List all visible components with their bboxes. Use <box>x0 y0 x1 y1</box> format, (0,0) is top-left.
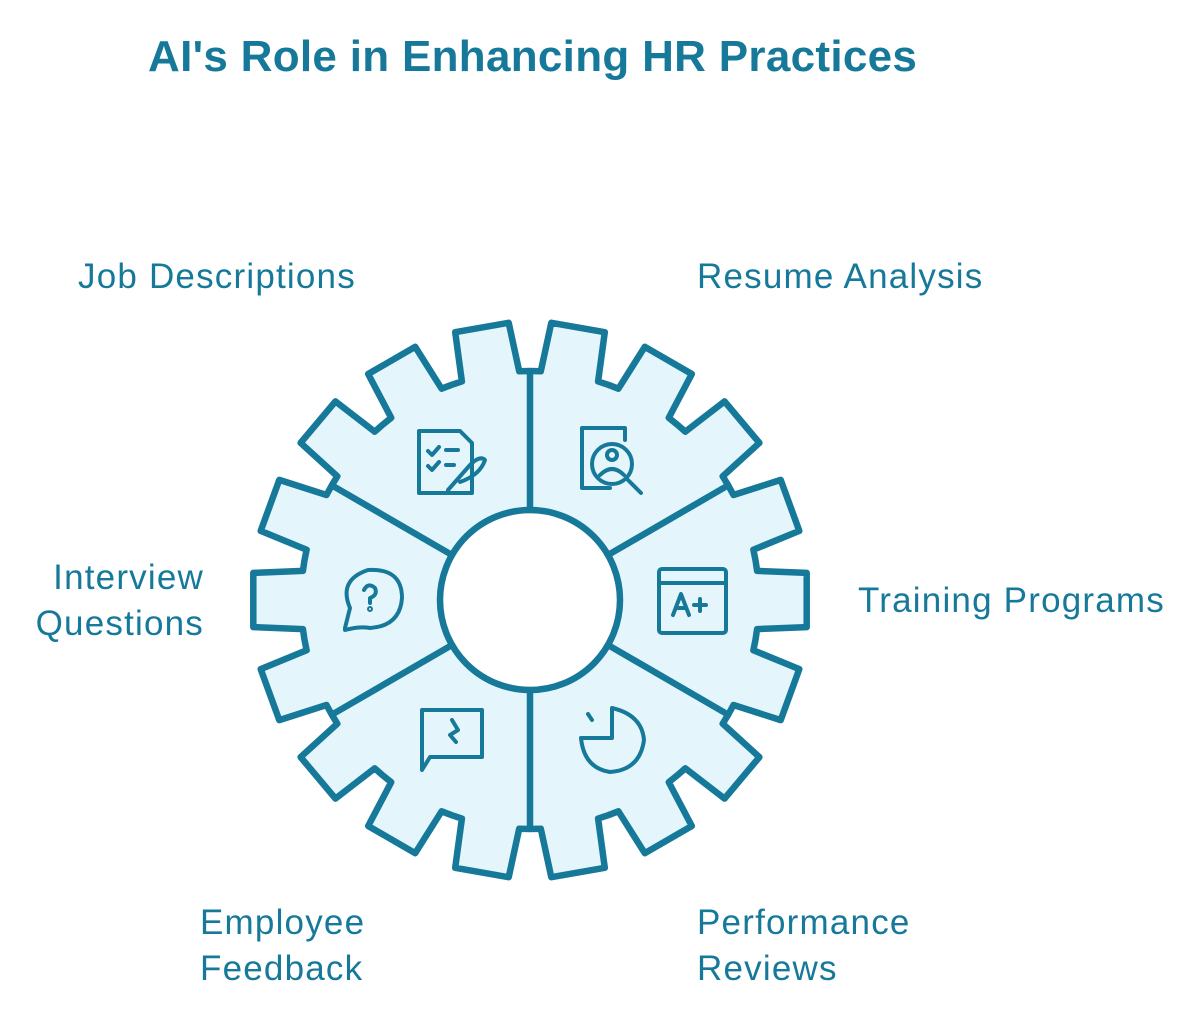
label: employee feedback: Employee <box>200 903 365 942</box>
label: training programs: Training Programs <box>858 581 1165 620</box>
icon: training programs <box>659 569 726 633</box>
label: performance reviews: Reviews <box>697 949 838 988</box>
label: employee feedback <box>200 903 365 988</box>
label: interview questions: Questions <box>36 604 204 643</box>
icon: employee feedback <box>422 710 482 770</box>
icon: interview questions <box>345 570 402 630</box>
label: resume analysis: Resume Analysis <box>697 257 983 296</box>
label: performance reviews <box>697 903 911 988</box>
label: job descriptions: Job Descriptions <box>78 257 356 296</box>
icon: resume analysis <box>582 428 641 493</box>
label: employee feedback: Feedback <box>200 949 363 988</box>
label: interview questions: Interview <box>53 558 204 597</box>
icon: job descriptions <box>419 431 485 493</box>
dividers <box>333 372 727 828</box>
inner circle <box>440 510 620 690</box>
gear body <box>253 323 807 877</box>
label: performance reviews: Performance <box>697 903 911 942</box>
label: interview questions <box>36 558 204 643</box>
icon: performance reviews <box>581 708 644 772</box>
title: AI's Role in Enhancing HR Practices <box>148 32 917 81</box>
